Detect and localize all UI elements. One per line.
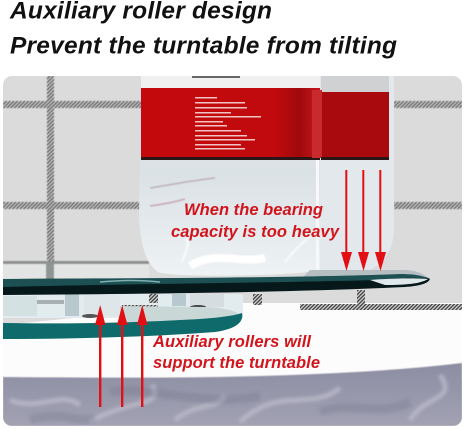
callout: too heavy <box>171 201 340 241</box>
callout: rollers support <box>152 333 320 372</box>
water bottle left <box>139 76 321 276</box>
lower glass turntable <box>3 306 242 339</box>
upper glass turntable <box>3 270 430 295</box>
arrows: upward support <box>95 305 148 407</box>
grey patterned tablecloth <box>3 363 462 426</box>
callout: rollers support: support the turntable <box>153 354 320 372</box>
rollers between glass <box>3 290 462 318</box>
tile wall grout lines <box>3 76 462 280</box>
title: heading line 2: Prevent the turntable from tilting <box>10 32 397 60</box>
arrows: downward load <box>341 170 386 271</box>
label small print <box>195 97 261 150</box>
callout: rollers support: Auxiliary rollers will <box>152 333 311 351</box>
white cloth <box>3 303 462 380</box>
water bottle right <box>312 76 394 270</box>
callout: too heavy: capacity is too heavy <box>171 223 340 241</box>
callout: too heavy: When the bearing <box>184 201 323 219</box>
